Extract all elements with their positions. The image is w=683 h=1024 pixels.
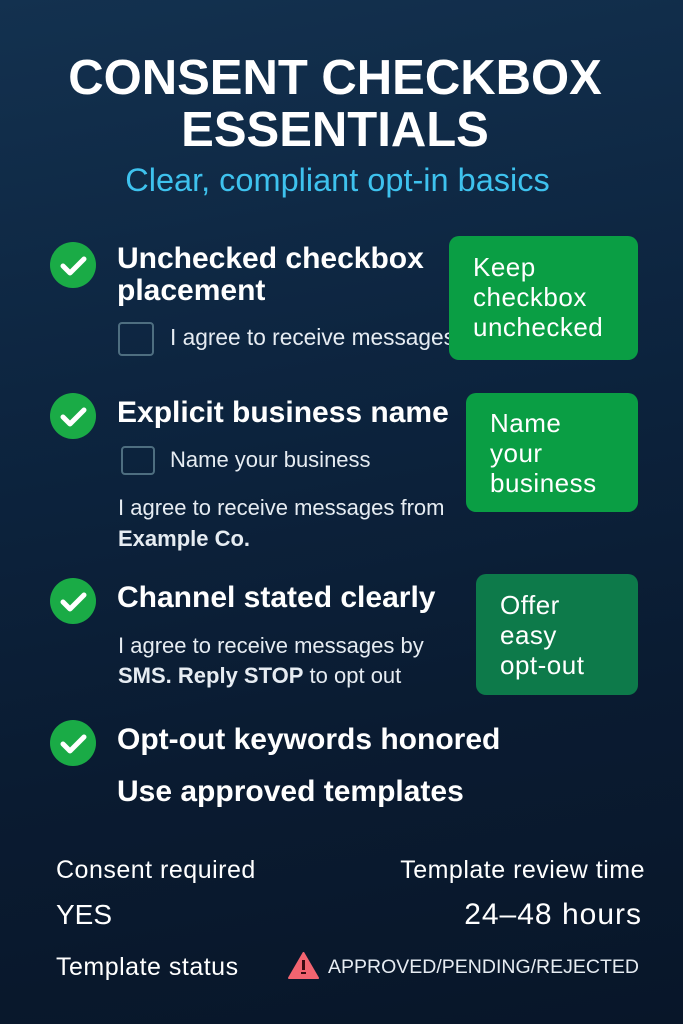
stat: template status: APPROVED/PENDING/REJECTED (328, 956, 639, 978)
heading 2: Explicit business name (117, 396, 449, 429)
stat: review time: Template review time (400, 856, 645, 884)
heading 5: Use approved templates (117, 775, 464, 808)
icon: check 2 (50, 393, 96, 439)
heading 1: Unchecked checkbox (117, 242, 424, 275)
consent text 2: I agree to receive messages from (118, 495, 444, 520)
icon: check 4 (50, 720, 96, 766)
callout: keep unchecked (449, 236, 638, 360)
callout: keep unchecked: Keep (473, 252, 536, 282)
consent text 2 (118, 495, 444, 551)
item 4 (50, 720, 500, 808)
consent text 3 (118, 633, 424, 688)
checkbox 1 (118, 322, 154, 356)
callout: opt-out (476, 574, 638, 695)
callout: name business: your (490, 438, 543, 468)
callout: opt-out: easy (500, 620, 557, 650)
stat: review time: 24–48 hours (464, 898, 642, 931)
callout: keep unchecked: unchecked (473, 312, 603, 342)
heading 1: placement (117, 274, 265, 307)
consent text 2: Example Co. (118, 526, 250, 551)
checkbox 2 (121, 446, 155, 475)
consent text 3: I agree to receive messages by (118, 633, 424, 658)
item 1 (50, 242, 455, 356)
checkbox text 1: I agree to receive messages (170, 324, 455, 350)
stat: consent required: Consent required (56, 856, 256, 884)
icon: check 1 (50, 242, 96, 288)
stat: template status (56, 952, 639, 981)
callout: opt-out: Offer (500, 590, 560, 620)
title: CONSENT CHECKBOX (68, 51, 602, 105)
consent text 3: SMS. Reply STOP to opt out (118, 663, 401, 688)
stat: consent required (56, 856, 256, 930)
heading 4: Opt-out keywords honored (117, 723, 500, 756)
stat: template status: Template status (56, 953, 239, 981)
callout: name business (466, 393, 638, 512)
item 3 (50, 578, 436, 688)
heading 1 (117, 242, 424, 307)
subtitle: Clear, compliant opt-in basics (125, 162, 550, 198)
callout: keep unchecked: checkbox (473, 282, 587, 312)
checkbox text 2: Name your business (170, 447, 371, 472)
callout: opt-out: opt-out (500, 650, 584, 680)
stat: review time (400, 856, 645, 931)
item 2 (50, 393, 449, 551)
callout: name business: Name (490, 408, 561, 438)
title: ESSENTIALS (181, 103, 489, 157)
icon: check 3 (50, 578, 96, 624)
title (68, 51, 602, 157)
icon: warning (288, 952, 319, 979)
stat: consent required: YES (56, 899, 112, 930)
callout: name business: business (490, 468, 597, 498)
heading 3: Channel stated clearly (117, 581, 435, 614)
